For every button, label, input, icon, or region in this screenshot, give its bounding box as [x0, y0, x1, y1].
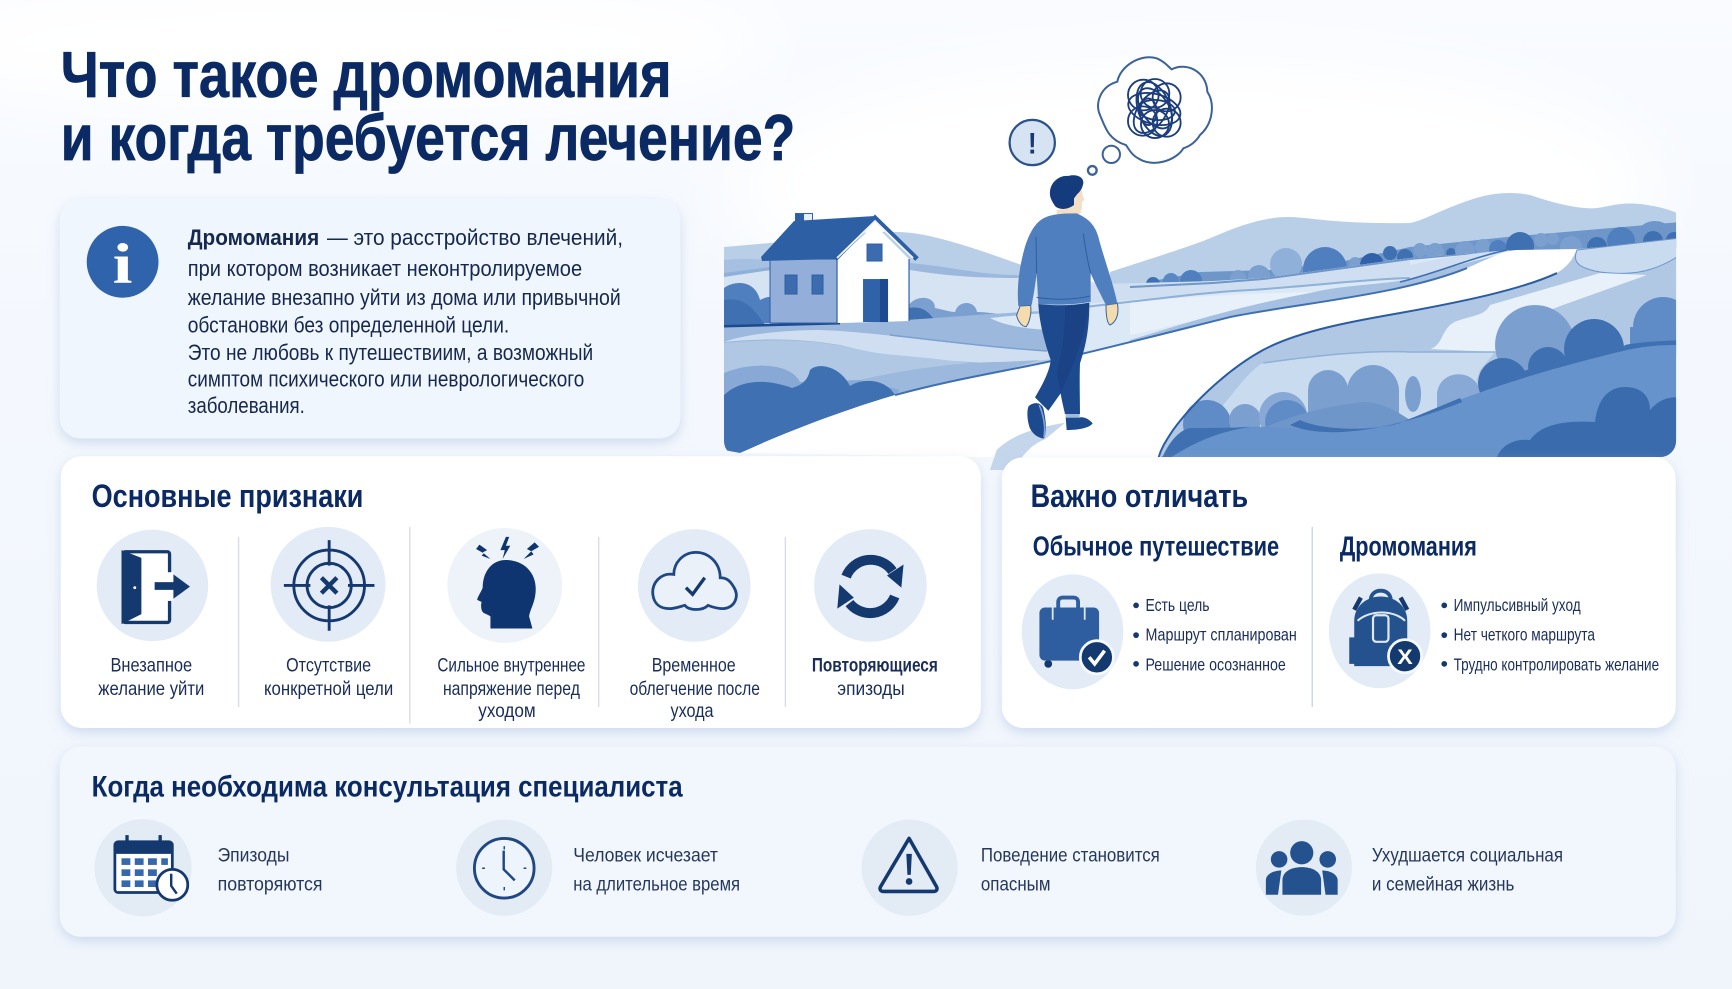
column: dromomania: Нет четкого маршрута	[1454, 626, 1595, 645]
heading: consult: Когда необходима консультация специалиста	[92, 770, 683, 803]
definition text: Дромомания	[188, 225, 319, 250]
item: episodes repeat: повторяются	[218, 874, 323, 895]
sign: inner tension	[437, 528, 585, 722]
sign: temporary relief: Временное	[652, 656, 736, 677]
illustration: thought bubble with tangle	[1088, 57, 1212, 175]
definition text: при котором возникает неконтролируемое	[188, 256, 582, 281]
item: disappears for long time	[456, 820, 740, 916]
sign: temporary relief: ухода	[670, 701, 714, 722]
definition text: обстановки без определенной цели.	[188, 313, 509, 338]
sign: inner tension: напряжение перед	[443, 679, 580, 700]
sign: no goal: Отсутствие	[286, 656, 371, 677]
icon: exclamation badge	[1010, 120, 1055, 165]
sign: no goal: конкретной цели	[264, 679, 393, 700]
definition text: симптом психического или неврологического	[188, 367, 584, 392]
definition text: Это не любовь к путешествиим, а возможный	[188, 340, 593, 365]
definition text	[188, 225, 623, 418]
item: disappears for long time: Человек исчезает	[573, 846, 718, 867]
item: social life worsens	[1256, 820, 1563, 916]
sign: temporary relief	[630, 529, 760, 722]
column: dromomania	[1329, 531, 1659, 688]
icon: house	[761, 213, 917, 323]
title: Что такое дромомания	[61, 38, 672, 111]
heading: main signs: Основные признаки	[92, 478, 363, 514]
panel: definition	[60, 199, 680, 439]
illustration: walking man	[990, 175, 1118, 470]
title	[61, 38, 795, 174]
item: behaviour becomes dangerous: Поведение становится	[981, 846, 1160, 867]
column: dromomania: Трудно контролировать желание	[1454, 656, 1659, 675]
sign: recurring episodes	[812, 529, 938, 700]
item: social life worsens: и семейная жизнь	[1372, 874, 1514, 895]
column: dromomania: Импульсивный уход	[1454, 596, 1581, 615]
column: ordinary travel: Есть цель	[1145, 596, 1210, 615]
sign: recurring episodes: эпизоды	[837, 679, 905, 700]
item: episodes repeat: Эпизоды	[218, 846, 289, 867]
sign: inner tension: уходом	[478, 701, 536, 722]
item: behaviour becomes dangerous: опасным	[981, 874, 1050, 895]
sign: sudden urge	[97, 530, 208, 700]
panel: main signs	[61, 456, 981, 728]
item: behaviour becomes dangerous	[862, 820, 1160, 916]
column: ordinary travel: Маршрут спланирован	[1145, 626, 1297, 645]
sign: temporary relief: облегчение после	[630, 679, 760, 700]
item: disappears for long time: на длительное время	[573, 874, 740, 895]
panel: when to consult a specialist	[60, 747, 1676, 937]
sign: no goal	[264, 527, 393, 700]
item: episodes repeat	[94, 819, 323, 916]
icon: info: i	[113, 233, 133, 296]
sign: sudden urge: желание уйти	[98, 679, 204, 700]
sign: inner tension: Сильное внутреннее	[437, 656, 585, 677]
panel: important to distinguish	[1002, 457, 1676, 728]
heading: distinguish: Важно отличать	[1031, 478, 1248, 514]
definition text: желание внезапно уйти из дома или привычной	[188, 285, 621, 310]
icon: info	[87, 226, 159, 298]
item: social life worsens: Ухудшается социальная	[1372, 846, 1563, 867]
icon: exclamation badge: !	[1028, 128, 1037, 161]
title: и когда требуется лечение?	[61, 101, 795, 174]
definition text: — это расстройство влечений,	[327, 225, 623, 250]
sign: sudden urge: Внезапное	[110, 656, 192, 677]
column: dromomania: Дромомания	[1340, 531, 1477, 562]
column: dromomania: X	[1397, 646, 1413, 669]
column: ordinary travel: Обычное путешествие	[1033, 531, 1279, 562]
column: ordinary travel: Решение осознанное	[1145, 656, 1286, 675]
column: ordinary travel	[1022, 531, 1297, 689]
sign: recurring episodes: Повторяющиеся	[812, 656, 938, 677]
illustration: landscape with road and house	[724, 193, 1693, 460]
definition text: заболевания.	[188, 393, 305, 418]
